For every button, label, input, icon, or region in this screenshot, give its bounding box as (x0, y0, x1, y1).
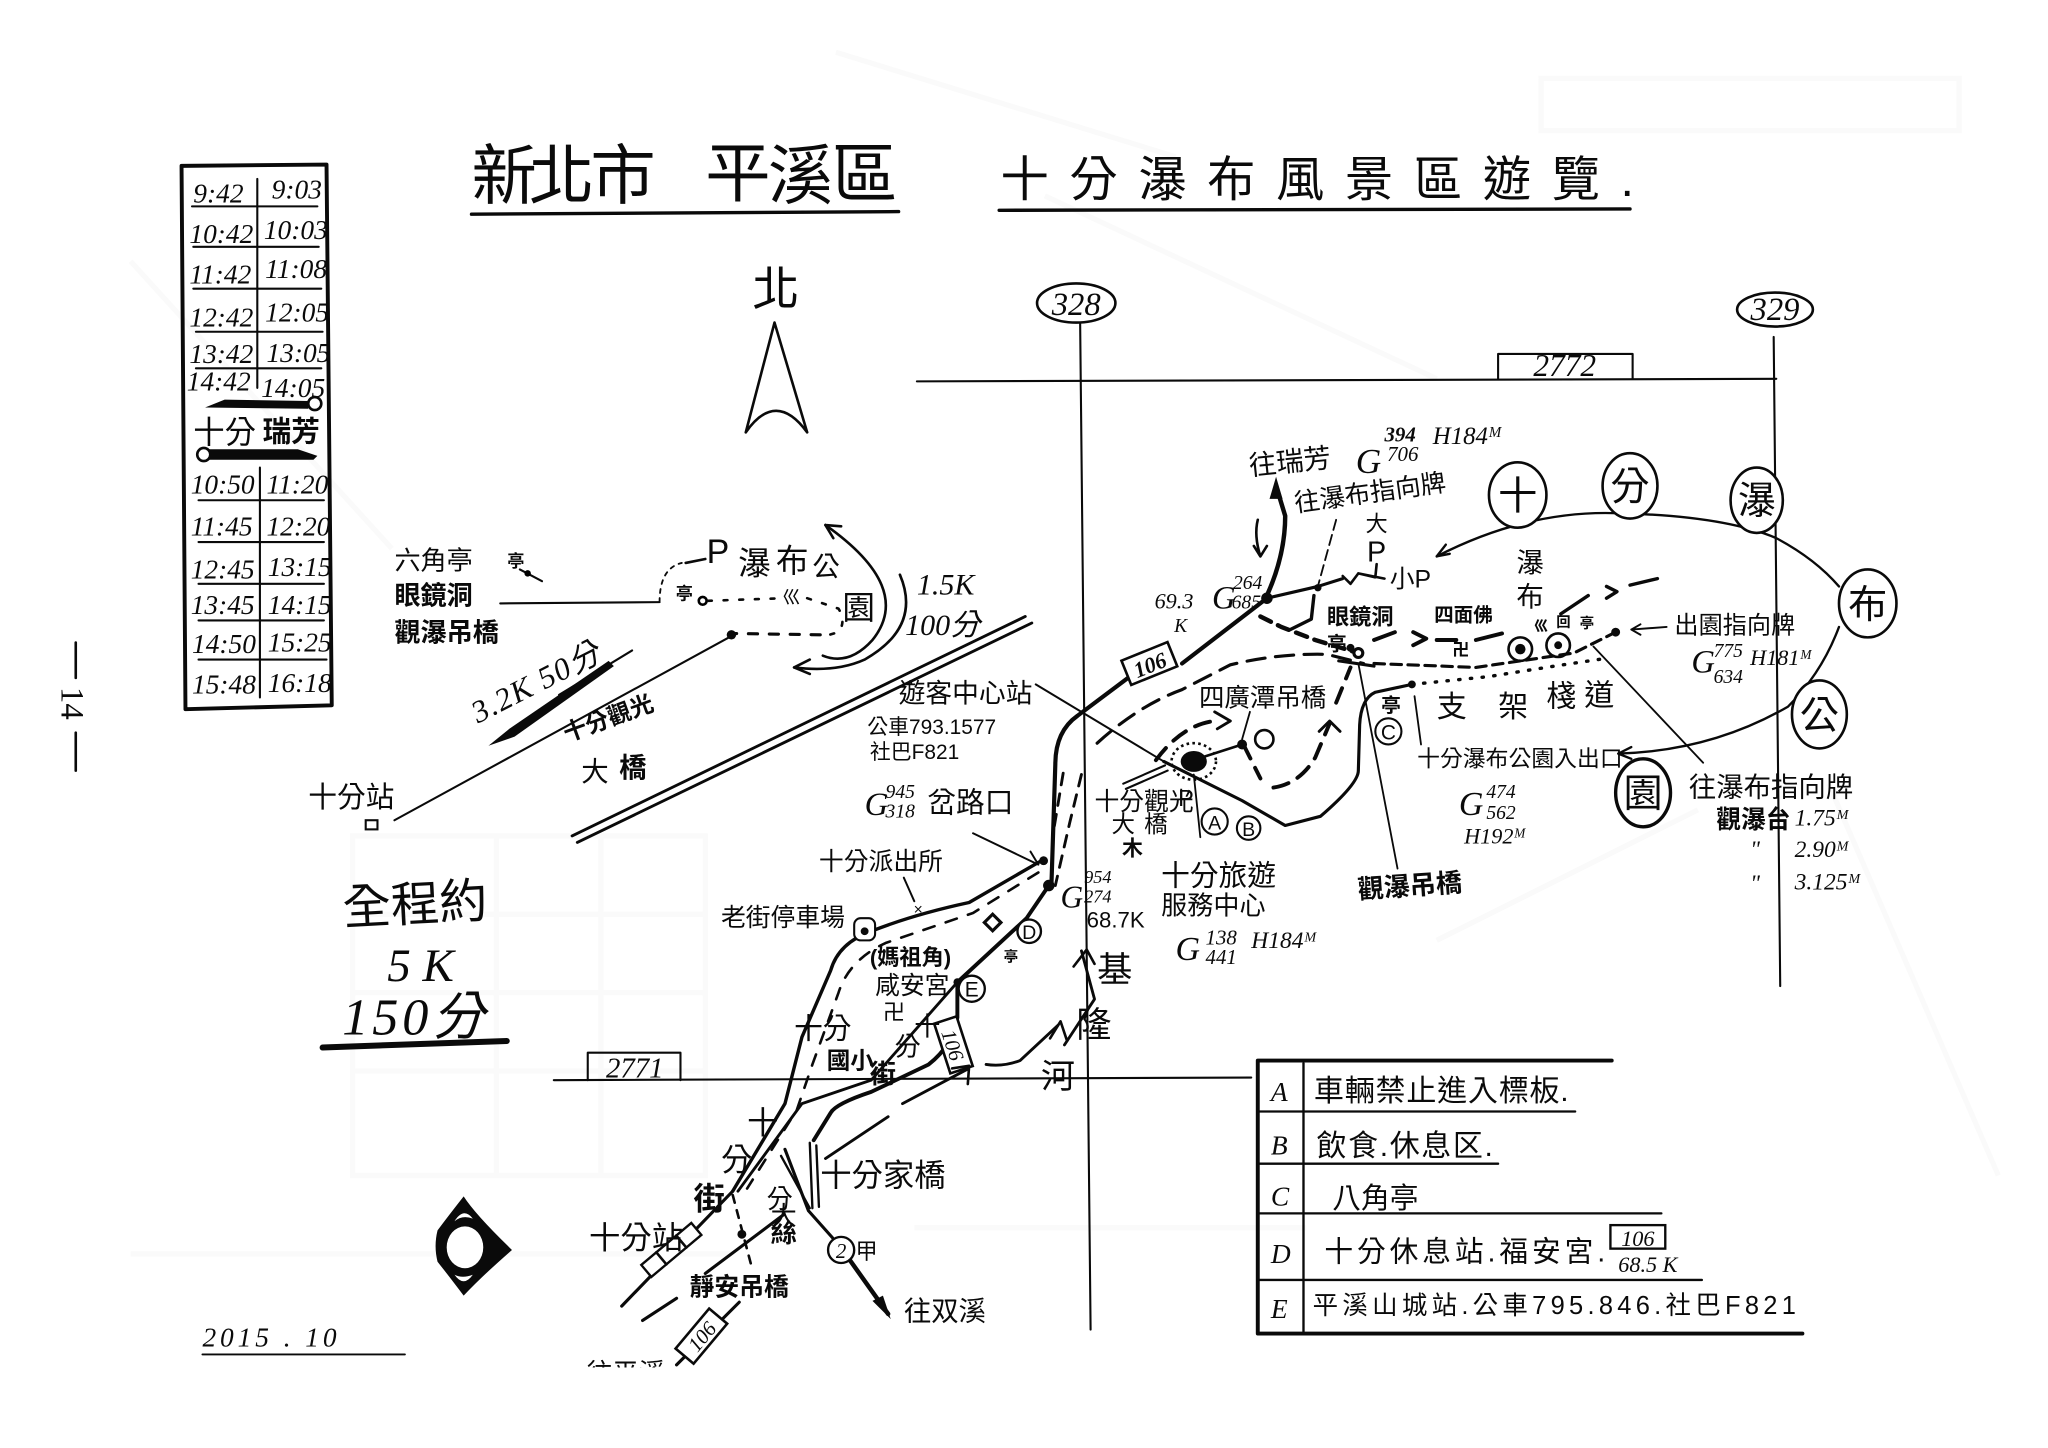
title: district: 新 (471, 140, 537, 213)
label: waterfall direction sign: 3.125ᴹ (1794, 869, 1861, 895)
park name circles: 瀑 (1738, 480, 1776, 522)
timetable: lower times (191, 470, 332, 700)
park name circles: 園 (1623, 773, 1663, 816)
label: parking: 老街停車場 (721, 904, 845, 932)
label: police station: × (914, 901, 923, 918)
trail along 106 (1097, 654, 1364, 743)
grid line 329: 329 (1750, 292, 1799, 328)
legend row D: D (1270, 1239, 1291, 1269)
label: plank trail: 道 (1584, 679, 1614, 712)
legend row D: 106 (1621, 1226, 1654, 1251)
label: visitor centre stop: 公車793.1577 (867, 716, 996, 739)
label: park entrance (1417, 746, 1623, 849)
grid line 328 (1037, 283, 1115, 1330)
label: exit sign: 775 (1714, 641, 1743, 662)
timetable: lower times: 12:20 (266, 512, 331, 542)
label: G264 and 69.3K: K (1173, 616, 1188, 637)
legend table (1258, 1061, 1802, 1334)
small arrow to road (1254, 520, 1267, 556)
legend row A: 車輛禁止進入標板. (1314, 1075, 1569, 1108)
inset: route line: P (707, 533, 729, 571)
Shifen bridge (781, 1143, 946, 1208)
label: Shifen old street: 街 (694, 1181, 725, 1216)
park name circles: 十 (1498, 475, 1537, 518)
marker 2甲: 甲 (855, 1239, 878, 1264)
road: south to Pingxi (622, 1191, 784, 1365)
label: exit sign: 634 (1714, 667, 1743, 688)
label: four-faced Buddha (1434, 605, 1493, 660)
label: G954: G (1061, 880, 1083, 915)
marker E: E (965, 979, 979, 1002)
label: plank trail: 支 (1437, 691, 1467, 724)
timetable: upper times: 12:42 (189, 303, 254, 333)
legend row C (1271, 1182, 1418, 1215)
label: Xian'an temple: (媽祖角) (870, 945, 951, 970)
label: exit sign: 出園指向牌 (1674, 612, 1795, 639)
page number (53, 643, 89, 771)
legend row D (1270, 1225, 1679, 1277)
dotted plank trail (1412, 658, 1607, 684)
grid line 2772 (917, 348, 1776, 383)
timetable: lower times: 13:15 (268, 552, 332, 582)
page number: 14 (53, 687, 89, 720)
label: tourism service centre: H184ᴹ (1250, 928, 1317, 954)
label: park entrance: H192ᴹ (1463, 824, 1526, 849)
label: G954: 68.7K (1087, 907, 1145, 932)
label: G954: 954 (1084, 867, 1111, 887)
label: police station: 十分派出所 (819, 848, 943, 876)
label: G374: H184ᴹ (1432, 423, 1503, 450)
inset: sightseeing bridge label: 橋 (619, 752, 647, 783)
inset: distance 1.5K: 100分 (905, 609, 983, 642)
road spur (1267, 579, 1343, 598)
legend row D: 68.5 K (1618, 1252, 1679, 1277)
park name circles: 分 (1610, 466, 1650, 509)
label: waterfall sign (1293, 469, 1448, 586)
label: Sigan pool suspension bridge (1199, 685, 1326, 758)
label: Sigan pool suspension bridge: 四廣潭吊橋 (1199, 685, 1326, 713)
parking P labels: 小P (1390, 566, 1431, 594)
railway at Shifen station: 十分站 (589, 1221, 683, 1256)
total distance note: 150分 (342, 988, 489, 1046)
total distance note: 5 K (387, 940, 457, 992)
park loop arrows (1437, 513, 1839, 759)
legend row E: E (1270, 1294, 1288, 1324)
label: waterfall: 瀑 (1516, 547, 1544, 578)
inset: route line (394, 533, 842, 820)
label: G264 and 69.3K: 69.3 (1155, 589, 1193, 614)
road: route 106 south (814, 886, 1049, 1140)
waterfall symbols: 亭 (1580, 614, 1594, 632)
label: tourism service centre: 441 (1206, 945, 1237, 969)
label: plank trail (1437, 679, 1614, 724)
road: to Shuangxi junction (733, 1195, 751, 1264)
timetable: upper times: 11:42 (189, 259, 252, 289)
label: G374: 394 (1383, 422, 1416, 446)
label: tourism service centre: G (1175, 931, 1200, 968)
title: district: 平 (705, 137, 771, 210)
label: four-faced Buddha: 卍 (1452, 641, 1469, 660)
legend row B: B (1271, 1131, 1288, 1161)
map: visitor centre area (867, 654, 1412, 969)
label: police station (819, 848, 943, 918)
label: G264 and 69.3K: 264 (1233, 573, 1263, 594)
timetable: upper times: 14:05 (261, 373, 325, 403)
timetable: upper times: 9:42 (193, 178, 244, 208)
label: Shifen school: 國小 (827, 1047, 874, 1073)
label: east street: 街 (870, 1059, 896, 1089)
legend row D: 十分休息站.福安宮. (1324, 1237, 1605, 1269)
label: sightseeing bridge: P (1178, 785, 1194, 811)
inset: waterfall park label: 瀑 (738, 545, 771, 582)
inset: distance 1.5K (905, 568, 983, 642)
timetable: upper times: 9:03 (272, 175, 322, 205)
trail to eyeglass cave (1260, 616, 1358, 653)
label: visitor centre stop (867, 679, 1032, 764)
timetable: upper times: 13:05 (266, 338, 330, 368)
label: tourism service centre: 138 (1206, 925, 1237, 949)
label: exit sign: H181ᴹ (1749, 645, 1812, 670)
inset: waterfall park label: 園 (842, 589, 875, 626)
timetable: lower times: 15:25 (268, 628, 332, 658)
label: sightseeing bridge: 十分觀光 (1095, 788, 1194, 816)
inset: route line: 亭 (507, 551, 524, 571)
label: junction: 岔路口 (927, 787, 1013, 819)
label: Jingan suspension bridge: 靜安吊橋 (690, 1274, 789, 1302)
label: tourism service centre (1161, 861, 1317, 969)
marker D: D (1022, 922, 1036, 944)
timetable: lower times: 11:45 (191, 512, 253, 542)
timetable: lower times: 15:48 (192, 670, 256, 700)
label: tourism service centre: 十分旅遊 (1161, 861, 1276, 893)
timetable: direction arrows and stations (193, 397, 321, 461)
label: sightseeing bridge (1095, 775, 1200, 860)
label: east street: 絲 (771, 1218, 797, 1248)
inset: waterfall park label: 公 (812, 551, 840, 582)
map: main roads (622, 477, 1285, 1365)
Jilong River (825, 950, 1132, 1159)
label: waterfall (1516, 547, 1544, 612)
north arrow (746, 263, 807, 432)
label: plank trail: 架 (1498, 691, 1528, 724)
label: Shifen school (794, 1013, 874, 1073)
park name circles (1489, 453, 1896, 827)
label: junction: 945 (886, 782, 915, 803)
grid line 2771 (554, 1053, 1251, 1085)
timetable: lower times: 14:15 (268, 590, 332, 620)
timetable: lower times: 10:50 (191, 470, 255, 500)
timetable: upper times (187, 175, 330, 403)
label: G264 and 69.3K: 685 (1232, 593, 1261, 614)
inset: stops list: 眼鏡洞 (394, 581, 473, 611)
dashed trail near bridge (1156, 667, 1351, 788)
timetable: lower times: 11:20 (266, 470, 329, 500)
label: waterfall direction sign: 2.90ᴹ (1795, 837, 1850, 863)
timetable: upper times: 11:08 (265, 254, 327, 284)
markers A and B (1202, 808, 1260, 841)
label: parking (721, 904, 875, 940)
timetable panel (182, 165, 332, 709)
road: route 106 north (1267, 486, 1285, 596)
inset: route line: 巛 (782, 586, 801, 607)
legend row E: 平溪山城站.公車795.846.社巴F821 (1313, 1292, 1796, 1320)
trail past waterfall (1561, 579, 1657, 614)
route 106 markers: 106 (1130, 647, 1171, 683)
marker E (953, 976, 985, 1002)
marker 2甲 (828, 1237, 878, 1264)
Jilong River: 基 (1097, 951, 1132, 990)
label: waterfall direction sign: " (1750, 837, 1760, 863)
total distance note (323, 874, 507, 1047)
title: district: 區 (832, 138, 897, 211)
waterfall symbol (1123, 743, 1216, 789)
label: to Pingxi: 往平溪 (586, 1358, 665, 1388)
label: Shifen old street (694, 1106, 778, 1216)
label: exit sign (1631, 612, 1812, 688)
label: G374: 706 (1387, 442, 1419, 466)
label: waterfall: 布 (1516, 581, 1544, 612)
waterfall symbols (1509, 614, 1594, 661)
railway at Shifen station (589, 1221, 701, 1277)
label: sightseeing bridge: 木 (1122, 837, 1143, 860)
map: lower labels (575, 782, 1055, 1394)
label: plank trail: 棧 (1546, 681, 1576, 714)
map: northern section (1155, 422, 1896, 905)
label: waterfall direction sign: " (1750, 871, 1760, 897)
legend row C: C (1271, 1182, 1290, 1212)
label: park entrance: 十分瀑布公園入出口 (1417, 746, 1623, 772)
inset: Shifen station: 十分站 (308, 782, 394, 814)
label: east street: 分 (767, 1184, 793, 1214)
waterfall symbols: 巛 (1534, 619, 1548, 635)
grid line 329 (1737, 292, 1813, 986)
inset: stops list (394, 545, 499, 647)
route 106 markers: 106 (936, 1027, 969, 1064)
timetable: lower times: 16:18 (268, 668, 332, 698)
legend row B: 飲食.休息区. (1317, 1130, 1493, 1163)
inset: route line: 亭 (676, 583, 693, 603)
legend row A: A (1269, 1077, 1288, 1107)
label: four-faced Buddha: 四面佛 (1434, 605, 1493, 627)
Jilong River: 河 (1041, 1058, 1075, 1096)
route 106 markers: 106 (683, 1317, 722, 1356)
marker 2甲: 2 (836, 1239, 846, 1263)
Jilong River: 隆 (1076, 1006, 1111, 1045)
timetable: lower times: 14:50 (192, 629, 256, 659)
title: district: 溪 (768, 140, 833, 213)
inset: loop arrows (794, 525, 906, 674)
north arrow: 北 (752, 263, 799, 316)
label: Xian'an temple (870, 945, 951, 1025)
Shifen bridge: 十分家橋 (820, 1158, 946, 1193)
logo (436, 1196, 512, 1296)
grid line 328: 328 (1051, 287, 1101, 323)
inset: waterfall park label: 布 (776, 542, 808, 579)
label: eyeglass cave: 眼鏡洞 (1327, 604, 1394, 629)
label: to Pingxi (575, 1358, 692, 1394)
label: Shifen school: 十分 (794, 1013, 852, 1045)
total distance note: 全程約 (341, 874, 489, 936)
timetable: upper times: 10:03 (264, 215, 328, 245)
label: visitor centre stop: 社巴F821 (870, 741, 959, 764)
label: waterfall direction sign: 1.75ᴹ (1795, 805, 1850, 831)
label: G374: G (1356, 442, 1381, 481)
timetable: direction arrows and stations: 瑞芳 (263, 416, 320, 448)
timetable: lower times: 12:45 (191, 555, 255, 585)
label: G954 (1061, 867, 1145, 932)
inset: stops list: 六角亭 (394, 545, 473, 575)
label: sightseeing bridge: 橋 (1144, 811, 1168, 837)
panel: route overview inset (308, 525, 1032, 842)
waterfall symbols: 回 (1556, 615, 1571, 631)
label: park entrance: 562 (1486, 803, 1516, 824)
date: 2015 . 10 (202, 1323, 340, 1353)
label: east street: 分 (895, 1031, 921, 1061)
entrance leader and pavilion C: C (1381, 721, 1396, 744)
grid line 2772: 2772 (1533, 348, 1596, 383)
markers A and B: A (1208, 812, 1222, 834)
parking P labels: 大 (1366, 512, 1388, 537)
label: Xian'an temple: 咸安宮 (875, 972, 949, 1000)
marker D (984, 914, 1041, 965)
park name circles: 公 (1800, 695, 1839, 738)
label: junction: 318 (885, 802, 915, 823)
timetable: lower times: 13:45 (191, 590, 255, 620)
entrance leader and pavilion C: 亭 (1381, 694, 1401, 717)
label: waterfall viewing bridge: 觀瀑吊橋 (1357, 867, 1463, 905)
inset: Shifen station (308, 782, 394, 829)
label: G374 (1356, 422, 1503, 481)
label: east street: 大 (771, 1201, 797, 1231)
label: park entrance: G (1459, 786, 1483, 823)
label: to Shuangxi: 往双溪 (904, 1295, 986, 1326)
label: Shifen old street: 十 (747, 1106, 778, 1141)
label: park entrance: 474 (1486, 782, 1516, 803)
timetable: direction arrows and stations: 十分 (193, 415, 256, 450)
title: district: 市 (590, 140, 656, 213)
markers A and B: B (1242, 819, 1255, 841)
label: waterfall direction sign: 往瀑布指向牌 (1689, 772, 1853, 803)
road: old street (733, 859, 1044, 1191)
entrance leader and pavilion C (1375, 694, 1421, 744)
label: exit sign: G (1691, 645, 1715, 681)
route 106 markers (676, 642, 1178, 1364)
legend row C: 八角亭 (1332, 1183, 1418, 1215)
inset: sightseeing bridge label: 大 (581, 756, 609, 787)
label: sightseeing bridge: 大 (1111, 811, 1135, 837)
parking P labels (1343, 512, 1431, 594)
label: junction (865, 782, 1055, 891)
label: east street (767, 1012, 940, 1248)
label: eyeglass cave (1327, 604, 1398, 869)
label: to Ruifang: 往瑞芳 (1247, 442, 1332, 481)
inset: waterfall park label (738, 542, 875, 626)
label: G954: 274 (1084, 887, 1111, 907)
leader and road to park entrance (1036, 684, 1164, 761)
label: G264 and 69.3K (1155, 573, 1263, 637)
timetable: upper times: 14:42 (187, 367, 251, 397)
inset: distance 3.2K: 3.2K 50分 (464, 634, 608, 730)
label: waterfall direction sign: 觀瀑台 (1716, 805, 1791, 834)
label: waterfall sign: 往瀑布指向牌 (1293, 469, 1448, 518)
parking P labels: P (1367, 537, 1386, 569)
trail to Buddha shrine (1374, 632, 1502, 645)
inset: sightseeing bridge label: 十分觀光 (560, 690, 657, 747)
timetable: upper times: 12:05 (265, 297, 329, 327)
inset: sightseeing bridge label (560, 690, 657, 787)
park name circles: 布 (1848, 584, 1887, 627)
grid line 2771: 2771 (606, 1053, 663, 1085)
label: tourism service centre: 服務中心 (1161, 890, 1266, 920)
title: district: 北 (529, 140, 594, 213)
inset: distance 1.5K: 1.5K (917, 568, 976, 601)
river double line (572, 616, 1032, 842)
title: district (471, 137, 899, 214)
label: east street: 十 (914, 1012, 940, 1042)
label: G264 and 69.3K: G (1212, 581, 1236, 617)
inset: stops list: 觀瀑吊橋 (394, 617, 499, 647)
title: scenic area: 十分瀑布風景區遊覽. (1000, 153, 1634, 207)
label: Shifen old street: 分 (721, 1142, 752, 1177)
label: junction: G (865, 787, 888, 823)
label: waterfall direction sign (1593, 647, 1861, 897)
marker D: 亭 (1004, 947, 1018, 965)
label: visitor centre stop: 遊客中心站 (899, 679, 1032, 709)
label: eyeglass cave: 亭 (1327, 632, 1347, 655)
label: Xian'an temple: 卍 (883, 1000, 905, 1025)
timetable: upper times: 10:42 (189, 219, 254, 249)
timetable: upper times: 13:42 (189, 339, 254, 369)
